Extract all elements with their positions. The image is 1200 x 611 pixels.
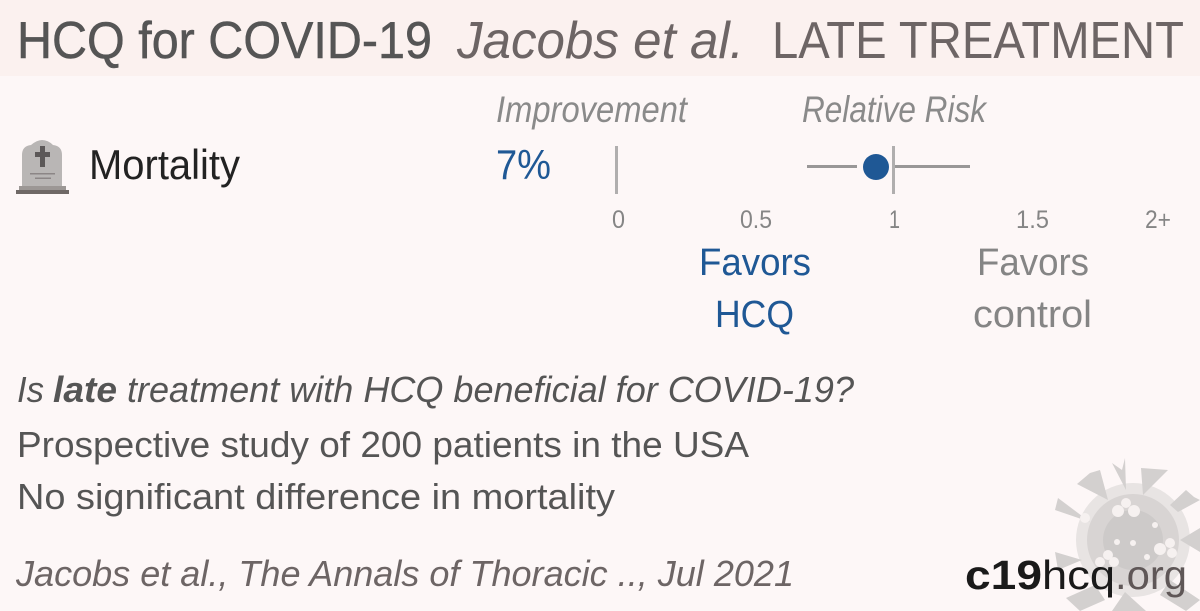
column heading: improvement: Improvement xyxy=(496,89,689,130)
favors control label: control xyxy=(973,294,1092,336)
axis labels: 1.5 xyxy=(1016,206,1049,234)
axis labels: 2+ xyxy=(1145,206,1171,234)
column heading: relative risk: Relative Risk xyxy=(802,89,988,130)
question: treatment with HCQ beneficial for COVID-19? xyxy=(127,369,854,410)
favors hcq label: Favors xyxy=(699,242,811,284)
icon: gravestone xyxy=(16,140,69,194)
study description: Prospective study of 200 patients in the USA xyxy=(17,424,749,465)
header band xyxy=(0,0,1200,76)
title: Jacobs et al. xyxy=(456,12,744,70)
favors control label: Favors xyxy=(977,242,1089,284)
favors hcq label xyxy=(699,242,811,336)
axis labels xyxy=(612,206,1171,234)
site logo: .org xyxy=(1115,552,1187,598)
citation: Jacobs et al., The Annals of Thoracic .., Jul 2021 xyxy=(15,553,794,594)
site logo: c19 xyxy=(965,552,1042,598)
question: Is xyxy=(17,369,44,410)
forest plot xyxy=(615,146,970,194)
question: late xyxy=(53,369,117,410)
favors control label xyxy=(973,242,1092,336)
icon: virus watermark xyxy=(1055,458,1200,611)
axis labels: 0 xyxy=(612,206,625,234)
title xyxy=(17,12,1184,70)
axis labels: 1 xyxy=(889,206,900,234)
improvement value: 7% xyxy=(496,141,551,188)
site logo xyxy=(965,552,1187,598)
favors hcq label: HCQ xyxy=(715,294,794,336)
title: HCQ for COVID-19 xyxy=(17,12,432,70)
outcome label: mortality: Mortality xyxy=(89,141,240,188)
finding: No significant difference in mortality xyxy=(17,476,615,517)
axis labels: 0.5 xyxy=(740,206,772,234)
site logo: hcq xyxy=(1042,552,1115,598)
